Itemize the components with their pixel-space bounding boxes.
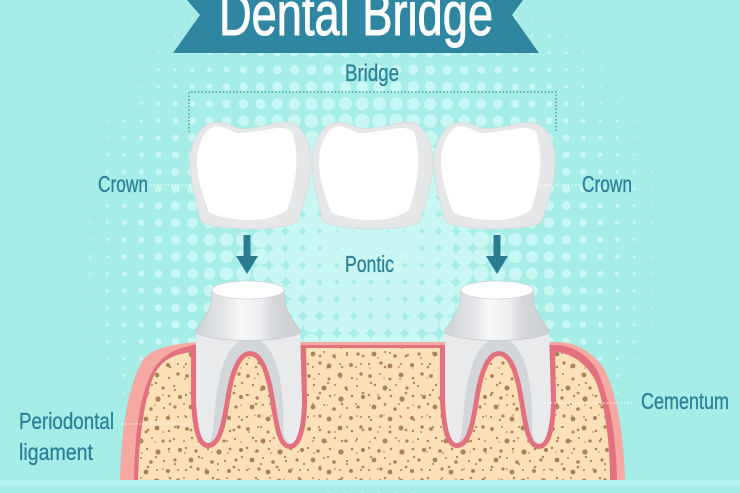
arrow: right xyxy=(486,235,508,274)
gum inner xyxy=(134,345,617,480)
label: Pontic: Pontic xyxy=(345,251,394,277)
crown: left xyxy=(190,122,311,229)
arrow: left xyxy=(236,235,258,274)
bone speckles xyxy=(138,348,610,480)
root shading xyxy=(208,338,290,444)
collar xyxy=(445,290,549,340)
label: Crown left: Crown xyxy=(98,171,148,197)
gum outer xyxy=(120,342,625,480)
tooth abutment: left xyxy=(196,281,302,444)
bone xyxy=(138,348,610,480)
root xyxy=(196,330,302,444)
title banner xyxy=(173,0,539,53)
tooth abutment: right xyxy=(445,281,551,444)
label: Crown right: Crown xyxy=(582,171,632,197)
bridge crowns xyxy=(190,122,555,229)
gum and bone xyxy=(120,342,625,480)
label: Bridge: Bridge xyxy=(345,60,399,87)
socket lining xyxy=(196,345,302,444)
leader lines xyxy=(122,185,632,424)
label: Periodontal ligament: Periodontal xyxy=(19,408,114,434)
fine bone speckles xyxy=(138,348,610,480)
crown: right xyxy=(434,122,555,229)
collar xyxy=(196,290,300,340)
label: Periodontal ligament xyxy=(19,408,114,465)
root shading xyxy=(457,338,539,444)
socket lining xyxy=(445,345,551,444)
cap xyxy=(461,281,533,299)
cap xyxy=(212,281,284,299)
crown: pontic xyxy=(312,122,433,229)
bridge bracket xyxy=(189,92,556,132)
root xyxy=(445,330,551,444)
label: Periodontal ligament: ligament xyxy=(19,439,94,465)
